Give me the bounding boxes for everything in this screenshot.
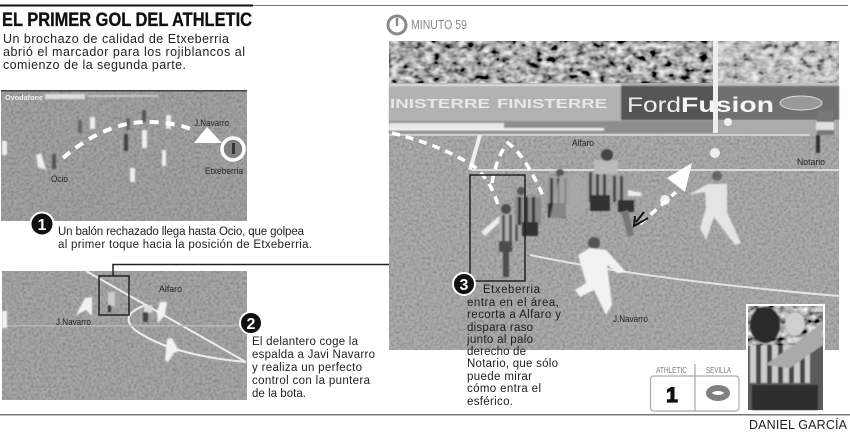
text: step 3: Notario, que sólo — [467, 358, 558, 370]
player labels: Alfaro — [159, 284, 182, 295]
step 3 number — [453, 273, 475, 295]
player labels: Notario — [797, 157, 825, 168]
text: step 3: cómo entra el — [467, 383, 541, 395]
text: step 3: junto al palo — [466, 334, 533, 346]
text: step 2: control con la puntera — [252, 375, 371, 387]
text: step 3: puede mirar — [467, 371, 532, 383]
text: step 1: Un balón rechazado llega hasta Ocio, que golpea — [58, 226, 305, 238]
player labels: J.Navarro — [194, 118, 229, 129]
goal post — [713, 41, 718, 133]
crowd — [389, 41, 839, 83]
panel: main photo: FINISTERRE — [497, 96, 607, 111]
step 2 number — [240, 312, 262, 334]
step 2 number: 2 — [247, 316, 256, 333]
player labels: Ocio — [51, 174, 68, 185]
player labels: Alfaro — [572, 138, 594, 149]
text: step 2: espalda a Javi Navarro — [252, 349, 375, 361]
player labels: Etxeberria — [205, 166, 244, 177]
intro text: comienzo de la segunda parte. — [3, 58, 186, 72]
arrow: black mark — [634, 212, 648, 226]
advertising strip: Ovodafone — [5, 95, 43, 102]
arrowhead: shot — [667, 163, 692, 192]
dashed ball path — [63, 122, 193, 158]
player labels — [572, 138, 825, 325]
panel: main photo — [389, 41, 839, 350]
dashed runs — [392, 133, 676, 224]
player labels — [56, 284, 182, 328]
scoreboard: SEVILLA — [706, 366, 732, 375]
text: step 2: y realiza un perfecto — [252, 362, 362, 374]
inset photo: celebration — [746, 304, 825, 412]
step 3 number: 3 — [460, 277, 469, 294]
credit: DANIEL GARCÍA — [749, 417, 848, 432]
net — [718, 41, 839, 121]
highlight box on main photo — [470, 175, 525, 281]
advertising boards — [389, 84, 839, 133]
text: step 2 — [252, 336, 375, 400]
text: step 1 — [58, 226, 312, 251]
pitch lines — [389, 135, 839, 296]
panel: main photo: Fusion — [681, 94, 774, 117]
intro text — [3, 32, 245, 72]
text: step 1: al primer toque hacia la posición de Etxeberria. — [58, 239, 312, 251]
connector box and line — [99, 264, 470, 315]
score: Sevilla — [709, 388, 727, 398]
text: step 3: dispara raso — [467, 322, 533, 334]
minute marker: MINUTO 59 — [411, 17, 467, 32]
score: Athletic: 1 — [666, 384, 678, 407]
title: EL PRIMER GOL DEL ATHLETIC — [2, 10, 252, 31]
player labels: J.Navarro — [613, 314, 648, 325]
text: step 3: Etxeberria — [483, 284, 541, 296]
text: step 3: esférico. — [467, 396, 513, 408]
player labels: J.Navarro — [56, 317, 91, 328]
text: step 3: derecho de — [467, 346, 526, 358]
intro text: abrió el marcador para los rojiblancos al — [3, 45, 245, 59]
scoreboard — [650, 364, 739, 411]
panel: photo 2, control — [2, 271, 247, 400]
text: step 3: entra en el área, — [467, 297, 559, 309]
text: step 2: de la bota. — [252, 388, 306, 400]
minute marker — [388, 16, 467, 34]
panel: photo 1, Ocio's pass — [1, 90, 247, 221]
text: step 3: recorta a Alfaro y — [467, 309, 561, 321]
scoreboard: ATHLETIC — [656, 366, 687, 375]
intro text: Un brochazo de calidad de Etxeberria — [3, 32, 229, 46]
ball — [660, 148, 720, 205]
players — [481, 110, 834, 315]
panel: main photo: Ford — [627, 94, 681, 117]
text: step 2: El delantero coge la — [252, 336, 359, 348]
panel: main photo: INISTERRE — [390, 96, 490, 111]
step 1 number: 1 — [38, 217, 47, 234]
text: step 3 — [466, 284, 561, 408]
player labels — [51, 118, 244, 185]
arrowhead — [194, 127, 222, 143]
highlight circle: Etxeberria — [222, 138, 244, 160]
step 1 number — [30, 212, 54, 236]
